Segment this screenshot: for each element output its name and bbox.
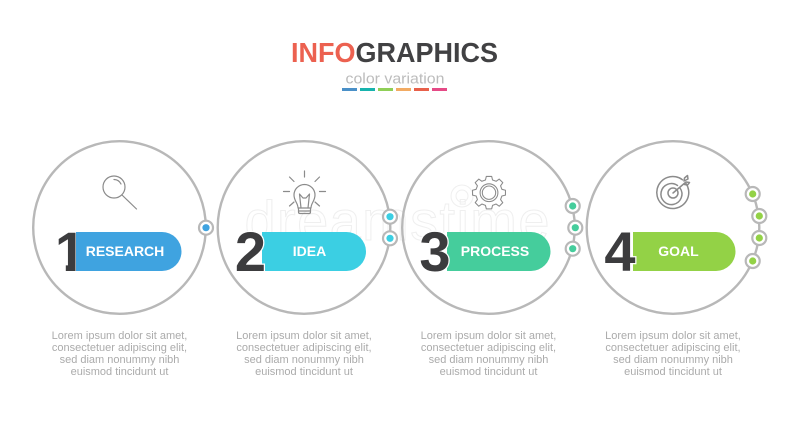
step 4 description: Lorem ipsum dolor sit amet, xyxy=(605,330,741,342)
step 1 description: sed diam nonummy nibh xyxy=(60,354,179,366)
step 3 description xyxy=(421,330,556,378)
step 4 description: sed diam nonummy nibh xyxy=(613,354,733,366)
colour variation legend xyxy=(342,88,447,91)
step 2 description xyxy=(236,330,372,378)
step 2 icon: light bulb xyxy=(284,171,326,214)
step 3 number: 3 xyxy=(419,220,451,283)
step 3 label pill xyxy=(447,232,550,271)
step 3 connector dots xyxy=(566,199,582,256)
step 2 description: sed diam nonummy nibh xyxy=(244,354,364,366)
step 4 label: GOAL xyxy=(658,243,699,259)
panel: step 4 goal xyxy=(587,141,766,378)
step 1 description: euismod tincidunt ut xyxy=(71,366,168,378)
step 1 description: consectetuer adipiscing elit, xyxy=(52,342,187,354)
step 4 ring xyxy=(587,141,759,314)
step 4 label pill xyxy=(633,232,736,271)
panel: step 3 process xyxy=(402,141,582,378)
panel: step 1 research xyxy=(33,141,213,378)
step 2 label pill xyxy=(262,232,366,271)
step 3 description: euismod tincidunt ut xyxy=(440,366,537,378)
step 4 description xyxy=(605,330,741,378)
step 2 description: euismod tincidunt ut xyxy=(255,366,353,378)
step 4 description: euismod tincidunt ut xyxy=(624,366,722,378)
title: INFOGRAPHICS xyxy=(291,37,498,68)
step 4 number: 4 xyxy=(604,220,636,283)
step 3 label: PROCESS xyxy=(461,243,529,259)
step 1 icon: magnifying glass xyxy=(103,176,136,209)
step 3 description: Lorem ipsum dolor sit amet, xyxy=(421,330,556,342)
step 2 number: 2 xyxy=(235,220,266,283)
step 1 description xyxy=(52,330,187,378)
step 4 connector dots xyxy=(746,187,766,268)
step 1 connector dot xyxy=(199,221,213,235)
step 2 description: Lorem ipsum dolor sit amet, xyxy=(236,330,372,342)
step 2 description: consectetuer adipiscing elit, xyxy=(236,342,372,354)
panel: step 2 idea xyxy=(218,141,397,378)
watermark: dreamstime xyxy=(244,189,550,252)
step 3 icon: gear xyxy=(473,176,505,209)
step 4 description: consectetuer adipiscing elit, xyxy=(605,342,741,354)
step 1 description: Lorem ipsum dolor sit amet, xyxy=(52,330,187,342)
step 2 label: IDEA xyxy=(293,243,326,259)
step 1 number: 1 xyxy=(55,220,86,283)
step 3 description: sed diam nonummy nibh xyxy=(429,354,548,366)
step 1 label: RESEARCH xyxy=(86,243,164,259)
step 3 ring xyxy=(402,141,575,314)
step 4 icon: target xyxy=(657,176,690,209)
step 3 description: consectetuer adipiscing elit, xyxy=(421,342,556,354)
step 1 label pill xyxy=(76,232,182,271)
step 1 ring xyxy=(33,141,206,314)
subtitle: color variation xyxy=(346,70,444,88)
step 2 ring xyxy=(218,141,390,314)
step 2 connector dots xyxy=(383,210,397,245)
